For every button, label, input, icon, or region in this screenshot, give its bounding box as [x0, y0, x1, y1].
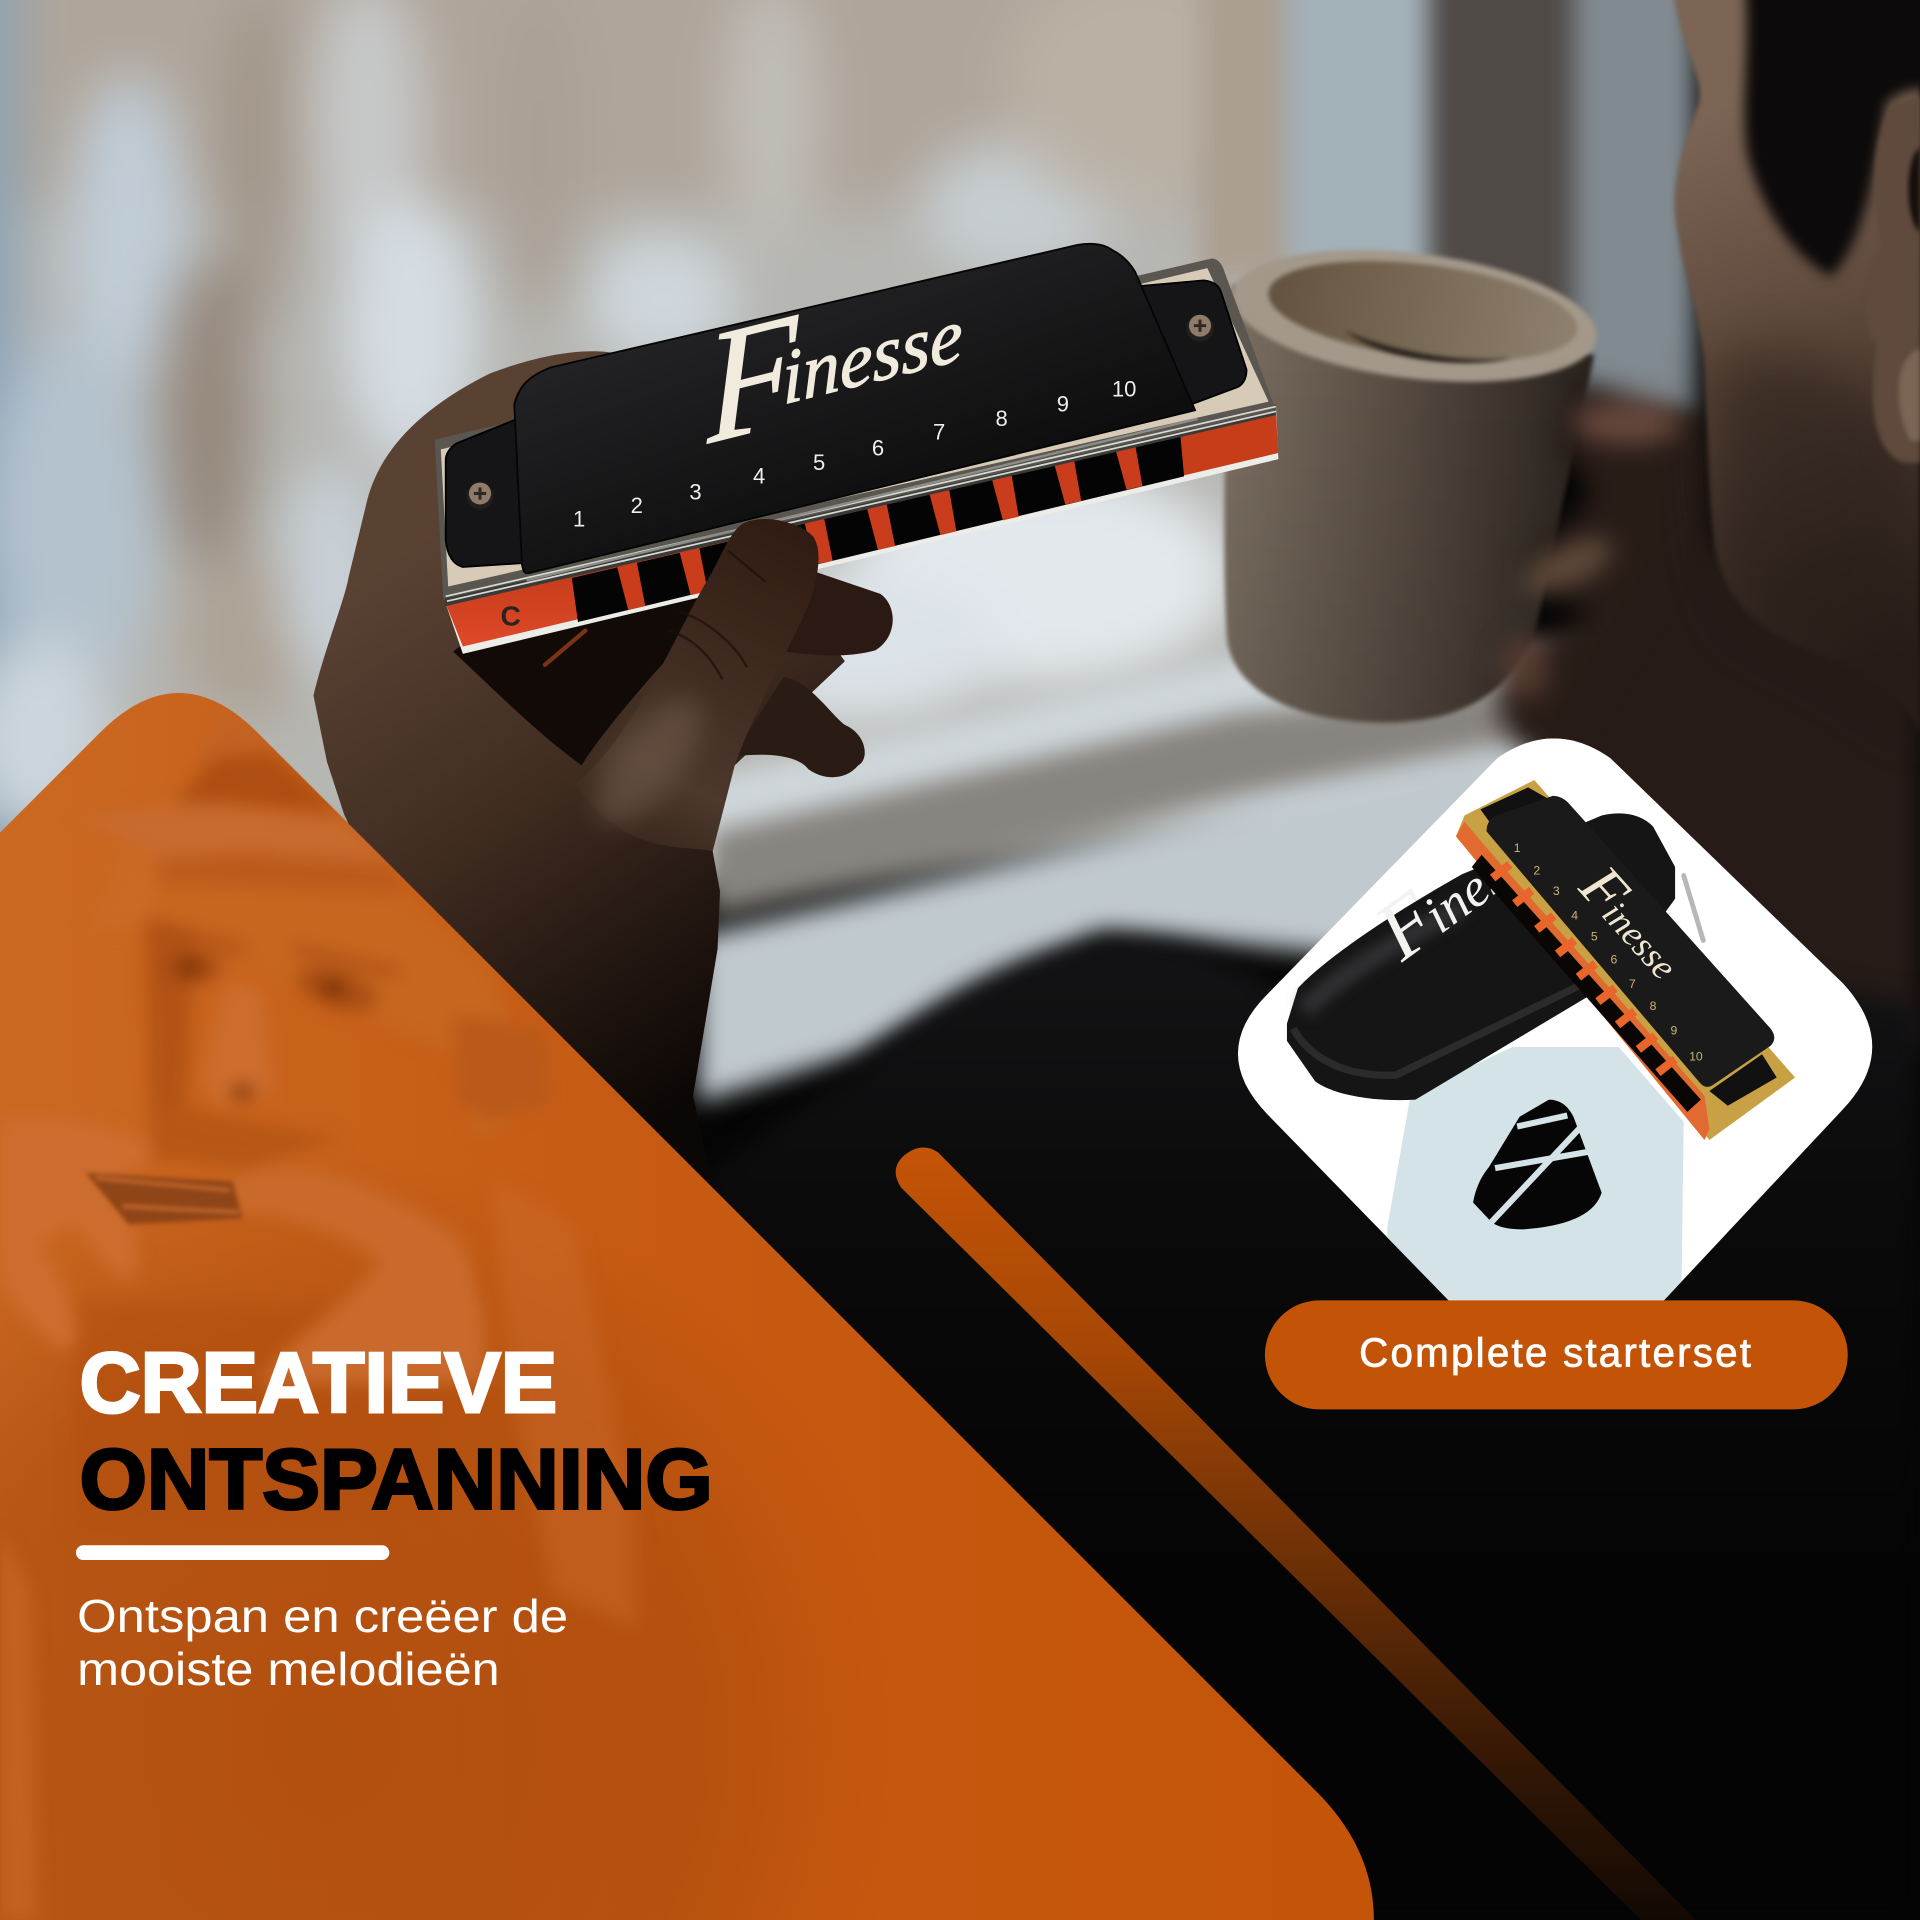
right eye area [294, 964, 378, 1016]
red dividers [617, 444, 1142, 610]
red reflection [545, 631, 585, 665]
hat brim [77, 802, 392, 863]
thumb over harmonica [576, 519, 819, 851]
red comb [446, 413, 1278, 647]
product card [1238, 738, 1872, 1310]
hand holding harmonica (back) [313, 351, 893, 1176]
left hand [0, 1116, 154, 1349]
dark sweater [704, 931, 1920, 1920]
palm and wrist [313, 351, 845, 1176]
main harmonica [435, 238, 1278, 654]
mug rim [1224, 232, 1604, 400]
window frame blur [1200, 0, 1696, 416]
reed plate stack [443, 404, 1276, 606]
face [1673, 0, 1920, 735]
lower dark tint [0, 1249, 798, 1920]
duotone photo: harmonica player [0, 728, 798, 1920]
hole numbers: 1 [573, 507, 585, 532]
heading [80, 1335, 713, 1528]
thumb base highlight [577, 682, 721, 841]
screw left [467, 482, 493, 509]
left eye area [188, 948, 224, 986]
hole numbers: 7 [933, 420, 945, 445]
hat crown [174, 753, 343, 814]
coffee mug [1224, 232, 1604, 722]
cover [1487, 796, 1774, 1087]
window view blur [0, 0, 1310, 882]
numbers: 6 [1610, 953, 1617, 967]
case top highlight [1304, 906, 1463, 1010]
numbers: 1 [1514, 841, 1521, 855]
case zipper [1293, 980, 1592, 1075]
mug body [1224, 284, 1594, 722]
coffee surface [1344, 331, 1512, 363]
numbers: 8 [1650, 999, 1657, 1013]
right hand [227, 1167, 486, 1384]
tab top [1480, 787, 1554, 845]
comb holes [572, 436, 1184, 622]
forehead shading [434, 926, 500, 1034]
mug shadow [1224, 284, 1594, 722]
main cover [514, 244, 1195, 573]
hole numbers: 4 [753, 464, 765, 489]
orange panel [0, 693, 1374, 1920]
shadow between thumb and palm [453, 551, 784, 765]
subtitle [77, 1590, 568, 1695]
index finger [784, 569, 893, 655]
pill text: Complete starterset [1359, 1330, 1751, 1376]
side silver edge [443, 404, 1278, 654]
heading underline [76, 1545, 389, 1560]
logo: Finesse [1566, 852, 1701, 991]
hole numbers: 10 [1112, 377, 1136, 402]
key ring [1684, 876, 1703, 940]
ear [1866, 96, 1920, 463]
hole numbers: 2 [631, 493, 643, 518]
diagonal stripe [896, 1148, 1696, 1920]
hole numbers: 5 [813, 450, 825, 475]
hole numbers [573, 377, 1136, 532]
comb dividers [1493, 864, 1675, 1073]
brows [196, 933, 393, 978]
zip case [1287, 798, 1703, 1100]
subtitle line two: mooiste melodieën [77, 1643, 500, 1695]
white diamond [1238, 738, 1872, 1304]
hole numbers: 6 [872, 436, 884, 461]
key letter C: C [500, 601, 521, 632]
Finesse logo: F [702, 278, 804, 479]
orange comb [1456, 822, 1709, 1140]
Finesse logo: inesse [781, 291, 964, 421]
lower cover lip [527, 419, 1198, 580]
nose [202, 980, 272, 1108]
numbers: 2 [1533, 863, 1540, 877]
mug inside [1263, 246, 1583, 376]
numbers: 5 [1591, 929, 1598, 943]
polishing cloth [1387, 1047, 1684, 1310]
thumb knuckle creases [667, 551, 765, 680]
hole numbers: 9 [1057, 391, 1069, 416]
screw right [1187, 315, 1213, 342]
shirt highlights [501, 1195, 634, 1619]
comb holes [1472, 855, 1701, 1112]
neck and shoulder [1506, 539, 1920, 1053]
tab bottom [1709, 1054, 1777, 1106]
middle finger [732, 677, 865, 777]
small harmonica [1456, 780, 1795, 1140]
face side [144, 918, 196, 1163]
pill label [1265, 1300, 1848, 1409]
beard shadow [1712, 350, 1920, 735]
top plate [435, 258, 1276, 599]
small harmonica in photo [86, 1173, 242, 1224]
numbers: 7 [1629, 977, 1636, 991]
heading line one: CREATIEVE [80, 1335, 557, 1431]
hole numbers: 8 [995, 406, 1008, 431]
silver edge lines [446, 407, 1276, 601]
blurred hand on mug [1497, 380, 1714, 808]
rear tab left [446, 410, 539, 567]
rear tab right [1120, 280, 1247, 410]
heading line two: ONTSPANNING [80, 1432, 713, 1528]
subtitle line one: Ontspan en creëer de [77, 1590, 568, 1642]
cloth logo pick [1473, 1100, 1602, 1229]
numbers: 10 [1689, 1049, 1703, 1063]
hair [1745, 0, 1920, 277]
person in profile [1497, 0, 1920, 1053]
case logo: Finesse [1358, 798, 1558, 978]
mouth shadow [186, 1110, 324, 1170]
window sill blur [686, 649, 1592, 1102]
hole numbers: 3 [689, 480, 702, 505]
ear and head side [456, 1022, 548, 1116]
gold plate [1456, 780, 1795, 1140]
numbers: 9 [1670, 1024, 1677, 1038]
numbers: 4 [1571, 909, 1578, 923]
numbers: 3 [1553, 884, 1560, 898]
numbers [1514, 841, 1703, 1063]
